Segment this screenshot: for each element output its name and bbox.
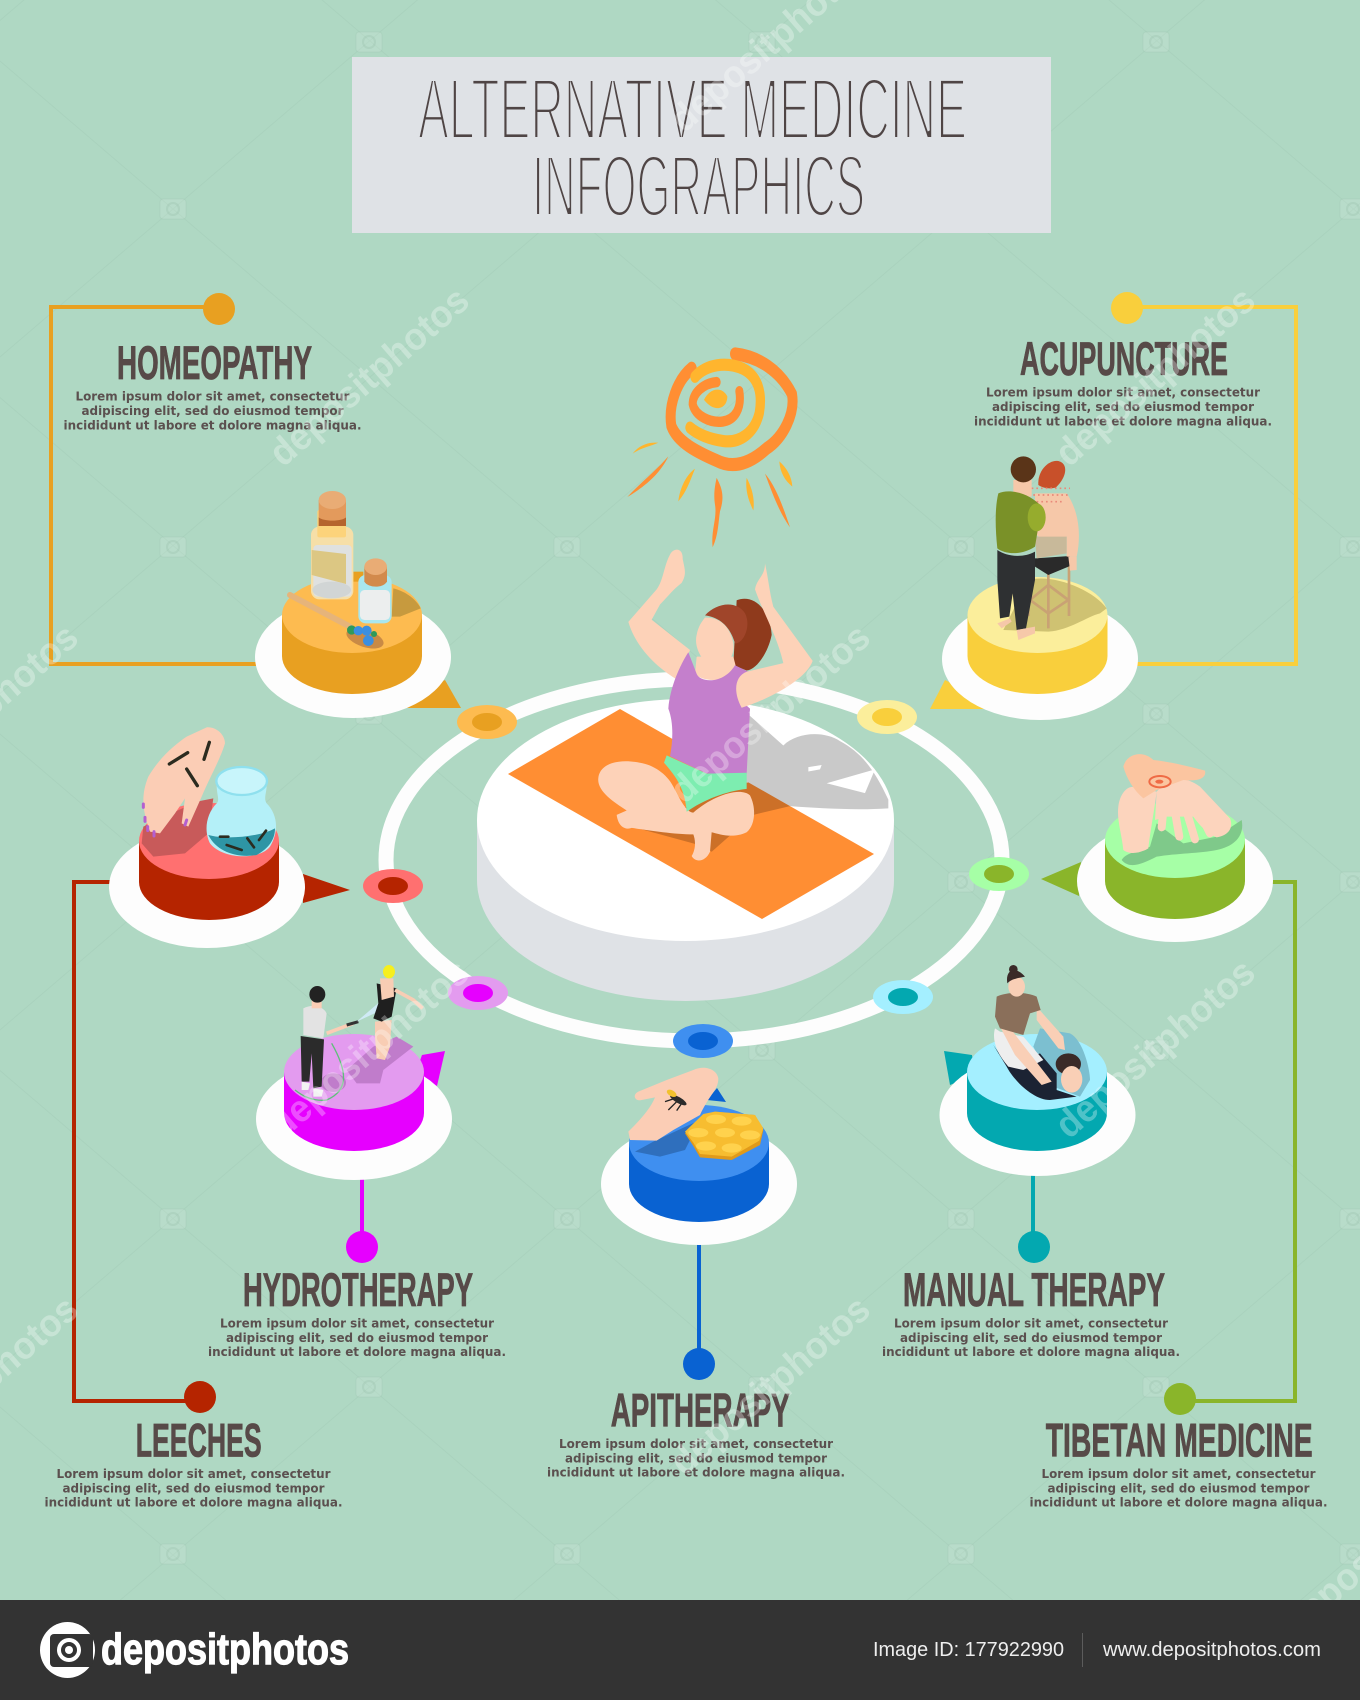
central platform with mat	[477, 699, 894, 1001]
platform: apitherapy	[601, 1068, 797, 1245]
text block: hydrotherapy	[208, 1316, 506, 1359]
platform: acupuncture	[930, 456, 1138, 720]
title panel	[352, 57, 1051, 235]
text block: leeches: adipiscing elit, sed do eiusmod tempor	[62, 1482, 325, 1496]
text block: homeopathy: adipiscing elit, sed do eiusmod tempor	[82, 404, 344, 418]
ring node: apitherapy	[673, 1024, 733, 1058]
ring node: leeches	[363, 869, 423, 903]
text block: apitherapy: adipiscing elit, sed do eiusmod tempor	[565, 1452, 828, 1466]
platform: tibetan medicine	[1041, 754, 1273, 942]
platform: homeopathy	[255, 491, 461, 718]
section: manual therapy	[882, 1263, 1180, 1359]
watermarks: depositphotos	[261, 279, 478, 475]
connector: acupuncture	[1111, 292, 1296, 664]
icon: healing hands	[1118, 754, 1242, 865]
footer bar	[0, 1600, 1360, 1700]
text block: homeopathy	[64, 390, 362, 432]
connector: hydrotherapy	[346, 1178, 378, 1263]
text block: tibetan medicine: incididunt ut labore et dolore magna aliqua.	[1030, 1496, 1328, 1510]
connector: manual therapy	[1018, 1175, 1050, 1263]
connector: tibetan medicine	[1164, 882, 1295, 1415]
heading: homeopathy: HOMEOPATHY	[117, 336, 312, 389]
watermarks: depositphotos	[662, 1288, 879, 1484]
icon: hand with leeches and jar	[142, 727, 276, 857]
text block: acupuncture	[974, 386, 1272, 428]
section: homeopathy	[64, 336, 362, 432]
watermarks: depositphotos	[662, 616, 879, 812]
section: leeches	[44, 1414, 342, 1510]
text block: manual therapy: adipiscing elit, sed do eiusmod tempor	[900, 1331, 1163, 1345]
icon: remedy bottles and spoon	[290, 491, 421, 653]
ring node: homeopathy	[457, 705, 517, 739]
text block: manual therapy: incididunt ut labore et dolore magna aliqua.	[882, 1345, 1180, 1359]
heading: apitherapy: APITHERAPY	[611, 1384, 790, 1437]
connector: leeches	[74, 882, 216, 1413]
section: acupuncture	[974, 332, 1272, 428]
watermarks: depositphotos	[1047, 279, 1264, 475]
platform: hydrotherapy	[256, 965, 452, 1180]
text block: hydrotherapy: Lorem ipsum dolor sit amet, consectetur	[220, 1316, 495, 1330]
image id: Image ID: 177922990	[873, 1639, 1064, 1661]
text block: acupuncture: adipiscing elit, sed do eiusmod tempor	[992, 400, 1255, 414]
section: tibetan medicine	[1030, 1414, 1328, 1510]
text block: apitherapy	[547, 1437, 845, 1480]
connector: apitherapy	[683, 1243, 715, 1380]
figure: meditating woman	[598, 550, 888, 860]
text block: acupuncture: incididunt ut labore et dolore magna aliqua.	[974, 414, 1272, 428]
connector: homeopathy	[51, 293, 260, 664]
watermarks: depositphotos	[261, 951, 478, 1147]
ring node: hydrotherapy	[448, 976, 508, 1010]
text block: homeopathy: Lorem ipsum dolor sit amet, consectetur	[76, 390, 350, 404]
text block: manual therapy: Lorem ipsum dolor sit amet, consectetur	[894, 1316, 1169, 1330]
heading: hydrotherapy: HYDROTHERAPY	[243, 1263, 473, 1316]
text block: tibetan medicine	[1030, 1467, 1328, 1510]
text block: leeches: Lorem ipsum dolor sit amet, consectetur	[56, 1467, 331, 1481]
text block: hydrotherapy: adipiscing elit, sed do eiusmod tempor	[226, 1331, 489, 1345]
text block: tibetan medicine: adipiscing elit, sed do eiusmod tempor	[1048, 1482, 1310, 1496]
text block: tibetan medicine: Lorem ipsum dolor sit amet, consectetur	[1042, 1467, 1316, 1481]
text block: leeches	[44, 1467, 342, 1510]
text block: homeopathy: incididunt ut labore et dolore magna aliqua.	[64, 418, 362, 432]
figure: therapist and patient with needles	[996, 456, 1107, 640]
logo wordmark: depositphotos	[101, 1625, 349, 1674]
platform: leeches	[109, 727, 350, 948]
text block: leeches: incididunt ut labore et dolore magna aliqua.	[44, 1496, 342, 1510]
text block: manual therapy	[882, 1316, 1180, 1359]
figure: massage therapist and patient	[993, 965, 1090, 1100]
title: INFOGRAPHICS	[532, 138, 865, 235]
icon: hand with bee and honeycomb	[628, 1068, 763, 1160]
ring node: acupuncture	[857, 700, 917, 734]
title	[418, 61, 967, 235]
text block: hydrotherapy: incididunt ut labore et dolore magna aliqua.	[208, 1345, 506, 1359]
text block: acupuncture: Lorem ipsum dolor sit amet, consectetur	[986, 386, 1261, 400]
platform: manual therapy	[940, 965, 1136, 1176]
website url: www.depositphotos.com	[1102, 1639, 1321, 1661]
section: hydrotherapy	[208, 1263, 506, 1359]
watermarks: depositphotos	[1047, 951, 1264, 1147]
heading: manual therapy: MANUAL THERAPY	[903, 1263, 1165, 1316]
section: apitherapy	[547, 1384, 845, 1480]
text block: apitherapy: incididunt ut labore et dolore magna aliqua.	[547, 1466, 845, 1480]
ring node: tibetan medicine	[969, 857, 1029, 891]
ring node: manual therapy	[873, 980, 933, 1014]
icon: camera logo	[40, 1622, 95, 1678]
text block: apitherapy: Lorem ipsum dolor sit amet, consectetur	[559, 1437, 834, 1451]
heading: leeches: LEECHES	[136, 1414, 262, 1467]
icon: sun	[627, 354, 793, 547]
figure: water jet therapy	[295, 965, 423, 1100]
white ring	[386, 679, 1002, 1041]
